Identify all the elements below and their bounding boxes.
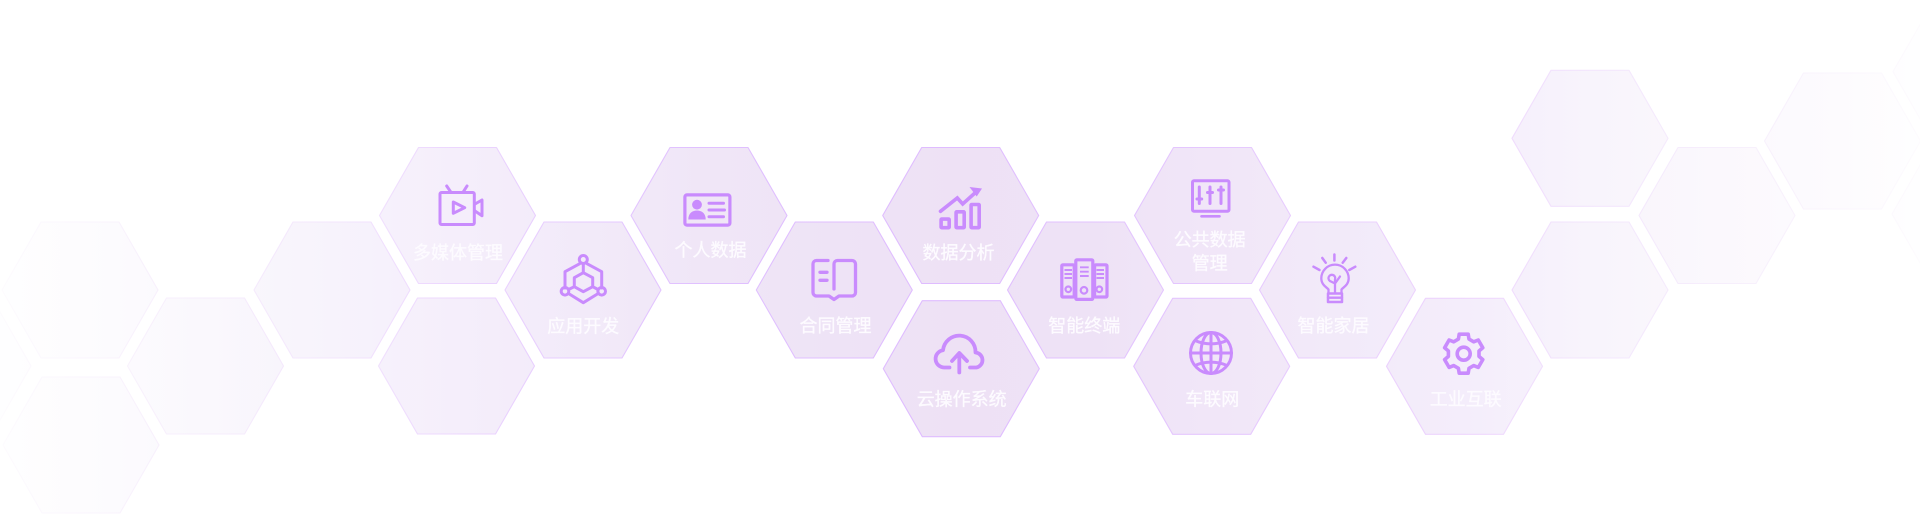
label: 多媒体管理: 多媒体管理 xyxy=(413,243,503,263)
label: 工业互联: 工业互联 xyxy=(1430,389,1502,409)
background hexagon: edge lower xyxy=(1892,146,1920,282)
background hexagon: right lower xyxy=(1512,222,1668,358)
hexagon: 车联网 xyxy=(1134,298,1290,434)
icon: id card xyxy=(685,195,730,225)
hexagon: 应用开发 xyxy=(505,222,661,358)
hexagon: 工业互联 xyxy=(1386,298,1542,434)
background hexagon: left lower xyxy=(3,377,159,513)
icon: hexagon network xyxy=(561,256,606,303)
hexagon: 智能终端 xyxy=(1008,222,1164,358)
label: 合同管理: 合同管理 xyxy=(800,316,872,336)
icon: cloud upload xyxy=(936,336,982,372)
label: 公共数据管理: 管理 xyxy=(1192,254,1228,274)
background hexagon: below media xyxy=(378,298,534,434)
label: 应用开发: 应用开发 xyxy=(547,316,619,336)
icon: globe xyxy=(1190,332,1232,374)
hexagon: 数据分析 xyxy=(883,148,1039,284)
icon: gear xyxy=(1445,334,1483,373)
background hexagon: edge upper xyxy=(1893,4,1920,140)
background hexagon: right middle xyxy=(1639,148,1795,284)
label: 数据分析: 数据分析 xyxy=(922,243,994,263)
icon: server racks xyxy=(1062,260,1107,299)
label: 个人数据: 个人数据 xyxy=(674,240,746,260)
label: 云操作系统: 云操作系统 xyxy=(917,389,1007,409)
hexagon: 云操作系统 xyxy=(883,301,1039,437)
background hexagon: left upper xyxy=(2,222,158,358)
background hexagon: left of media xyxy=(254,222,410,358)
hexagon: 合同管理 xyxy=(756,222,912,358)
background hexagon: right top xyxy=(1512,70,1668,206)
icon: light bulb xyxy=(1314,254,1355,302)
hexagon: 多媒体管理 xyxy=(380,148,536,284)
icon: rising bar chart xyxy=(940,187,982,228)
hexagon: 智能家居 xyxy=(1260,222,1416,358)
hexagon: 公共数据管理 xyxy=(1134,148,1290,284)
label: 公共数据管理: 公共数据 xyxy=(1174,230,1246,250)
hexagon: 个人数据 xyxy=(631,148,787,284)
label: 公共数据管理 xyxy=(1174,230,1246,274)
label: 智能家居: 智能家居 xyxy=(1298,316,1370,336)
background hexagon: right far top xyxy=(1764,73,1920,209)
background hexagon: far left xyxy=(0,298,31,434)
icon: monitor with sliders xyxy=(1192,181,1229,216)
icon: open book xyxy=(813,260,856,300)
icon: video camera tv xyxy=(440,186,482,224)
background hexagon: left middle xyxy=(128,298,284,434)
label: 车联网: 车联网 xyxy=(1185,389,1239,409)
label: 智能终端: 智能终端 xyxy=(1048,316,1120,336)
